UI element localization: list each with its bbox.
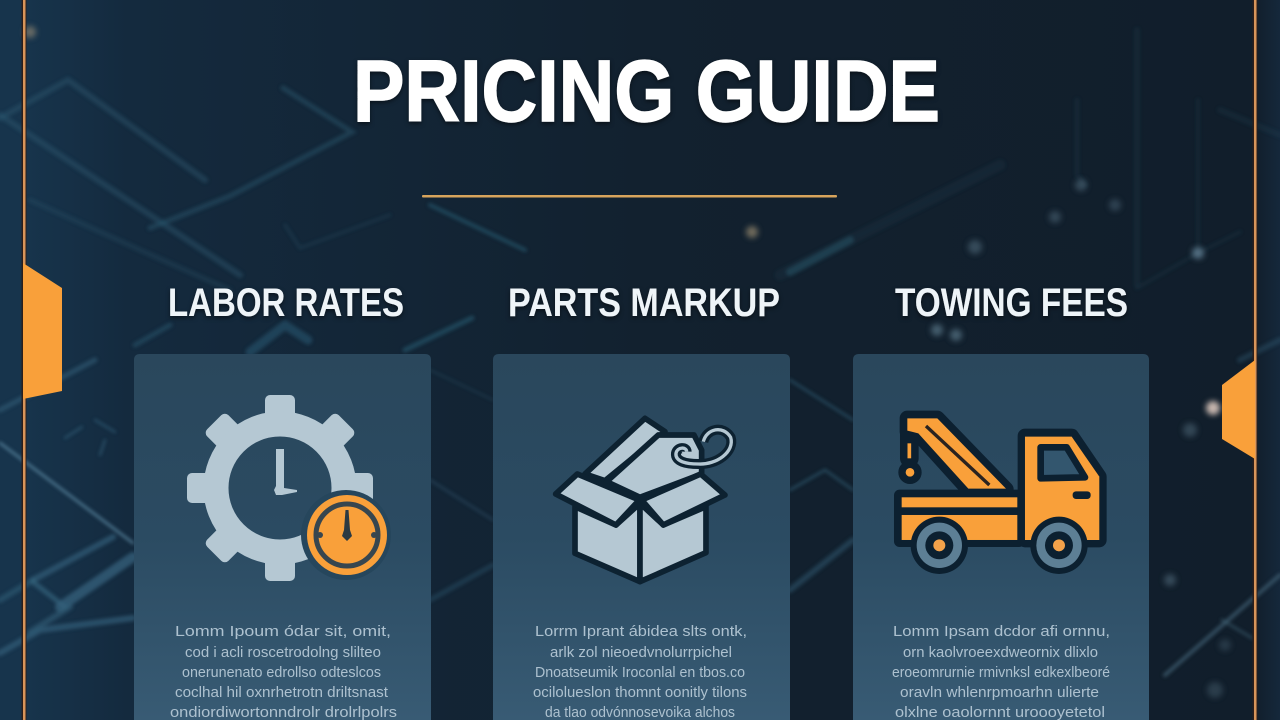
title: PRICING GUIDE xyxy=(353,43,940,140)
body text: parts markup: Dnoatseumik Iroconlal en tbos.co xyxy=(535,665,745,681)
panel: parts markup xyxy=(493,354,790,720)
body text: towing fees: orn kaolvroeexdweornix dlixlo xyxy=(903,645,1098,661)
body text: towing fees xyxy=(892,624,1110,720)
heading: labor rates: LABOR RATES xyxy=(168,281,404,325)
body text: parts markup: Lorrm Iprant ábidea slts ontk, xyxy=(535,624,747,640)
body text: towing fees: eroeomrurnie rmivnksl edkexlbeoré xyxy=(892,665,1110,681)
title divider xyxy=(422,195,837,198)
body text: towing fees: oravln whlenrpmoarhn ulierte xyxy=(900,685,1099,701)
left orange tab xyxy=(23,263,62,399)
body text: parts markup: arlk zol nieoedvnolurrpichel xyxy=(550,645,732,661)
left frame line xyxy=(22,0,26,720)
body text: labor rates: coclhal hil oxnrhetrotn driltsnast xyxy=(175,685,388,701)
right orange tab xyxy=(1222,360,1255,459)
heading: towing fees: TOWING FEES xyxy=(895,281,1128,325)
heading: parts markup: PARTS MARKUP xyxy=(508,281,780,325)
body text: parts markup: ocilolueslon thomnt oonitly tilons xyxy=(533,685,747,701)
body text: labor rates xyxy=(170,624,397,720)
body text: towing fees: Lomm Ipsam dcdor afi ornnu, xyxy=(893,624,1110,640)
body text: labor rates: Lomm Ipoum ódar sit, omit, xyxy=(175,624,391,640)
body text: parts markup xyxy=(533,624,747,720)
panel: towing fees xyxy=(853,354,1149,720)
icon: tow truck xyxy=(898,418,1099,574)
right frame line xyxy=(1252,0,1258,720)
body text: labor rates: cod i acli roscetrodolng slilteo xyxy=(185,645,381,661)
icon: open box with price tag xyxy=(556,418,731,582)
icon: gear with clock xyxy=(187,395,391,581)
panel: labor rates xyxy=(134,354,431,720)
body text: labor rates: onerunenato edrollso odteslcos xyxy=(182,665,381,681)
